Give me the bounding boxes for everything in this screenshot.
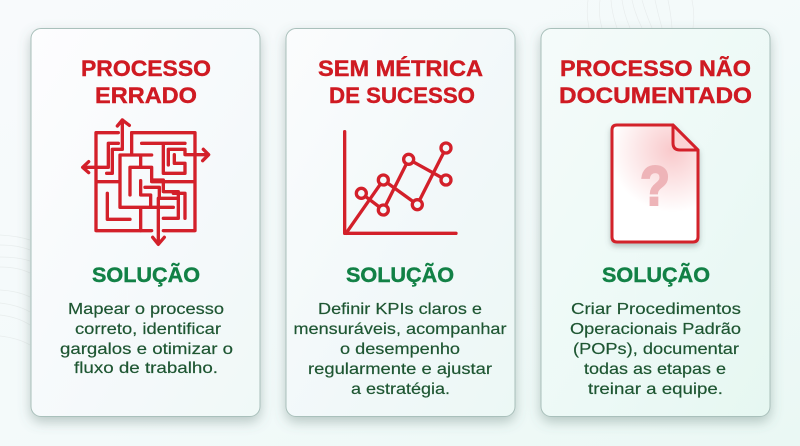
panel: processo não documentado bbox=[541, 28, 770, 416]
text: solution description bbox=[294, 301, 507, 398]
heading: processo não documentado: DOCUMENTADO bbox=[559, 83, 752, 108]
text: solution description: treinar a equipe. bbox=[588, 381, 723, 398]
text: solution description bbox=[60, 301, 233, 377]
text: solution description: (POPs), documentar bbox=[573, 341, 740, 358]
heading: processo errado: PROCESSO bbox=[81, 56, 211, 81]
icon: line chart bbox=[345, 132, 456, 233]
text: solution description: fluxo de trabalho. bbox=[74, 360, 218, 377]
text: solution description: a estratégia. bbox=[351, 381, 450, 398]
heading: processo não documentado: PROCESSO NÃO bbox=[560, 56, 751, 81]
panel: sem métrica de sucesso bbox=[286, 28, 515, 416]
icon: document with question mark: ? bbox=[640, 154, 670, 217]
text: solution description: o desempenho bbox=[340, 341, 460, 358]
heading: processo errado: ERRADO bbox=[95, 83, 197, 108]
text: solution description: Definir KPIs claros e bbox=[318, 301, 482, 318]
heading: solução: SOLUÇÃO bbox=[602, 264, 710, 287]
text: solution description: Criar Procedimentos bbox=[571, 301, 741, 318]
panel: processo errado bbox=[31, 28, 260, 416]
heading: solução: SOLUÇÃO bbox=[92, 264, 200, 287]
text: solution description: Operacionais Padrão bbox=[570, 321, 741, 338]
heading: solução: SOLUÇÃO bbox=[346, 264, 454, 287]
icon: maze with arrows bbox=[83, 120, 209, 244]
heading: sem métrica de sucesso bbox=[318, 56, 483, 108]
heading: processo errado bbox=[81, 56, 211, 108]
text: solution description: correto, identificar bbox=[75, 321, 222, 338]
heading: sem métrica de sucesso: DE SUCESSO bbox=[329, 83, 475, 108]
text: solution description: Mapear o processo bbox=[68, 301, 224, 318]
text: solution description: gargalos e otimizar o bbox=[60, 341, 233, 358]
text: solution description: todas as etapas e bbox=[584, 361, 726, 378]
text: solution description: regularmente e ajustar bbox=[308, 361, 493, 378]
heading: processo não documentado bbox=[559, 56, 752, 108]
text: solution description: mensuráveis, acompanhar bbox=[294, 321, 507, 338]
text: solution description bbox=[570, 301, 741, 398]
heading: sem métrica de sucesso: SEM MÉTRICA bbox=[318, 56, 483, 81]
icon: document with question mark bbox=[612, 125, 698, 242]
